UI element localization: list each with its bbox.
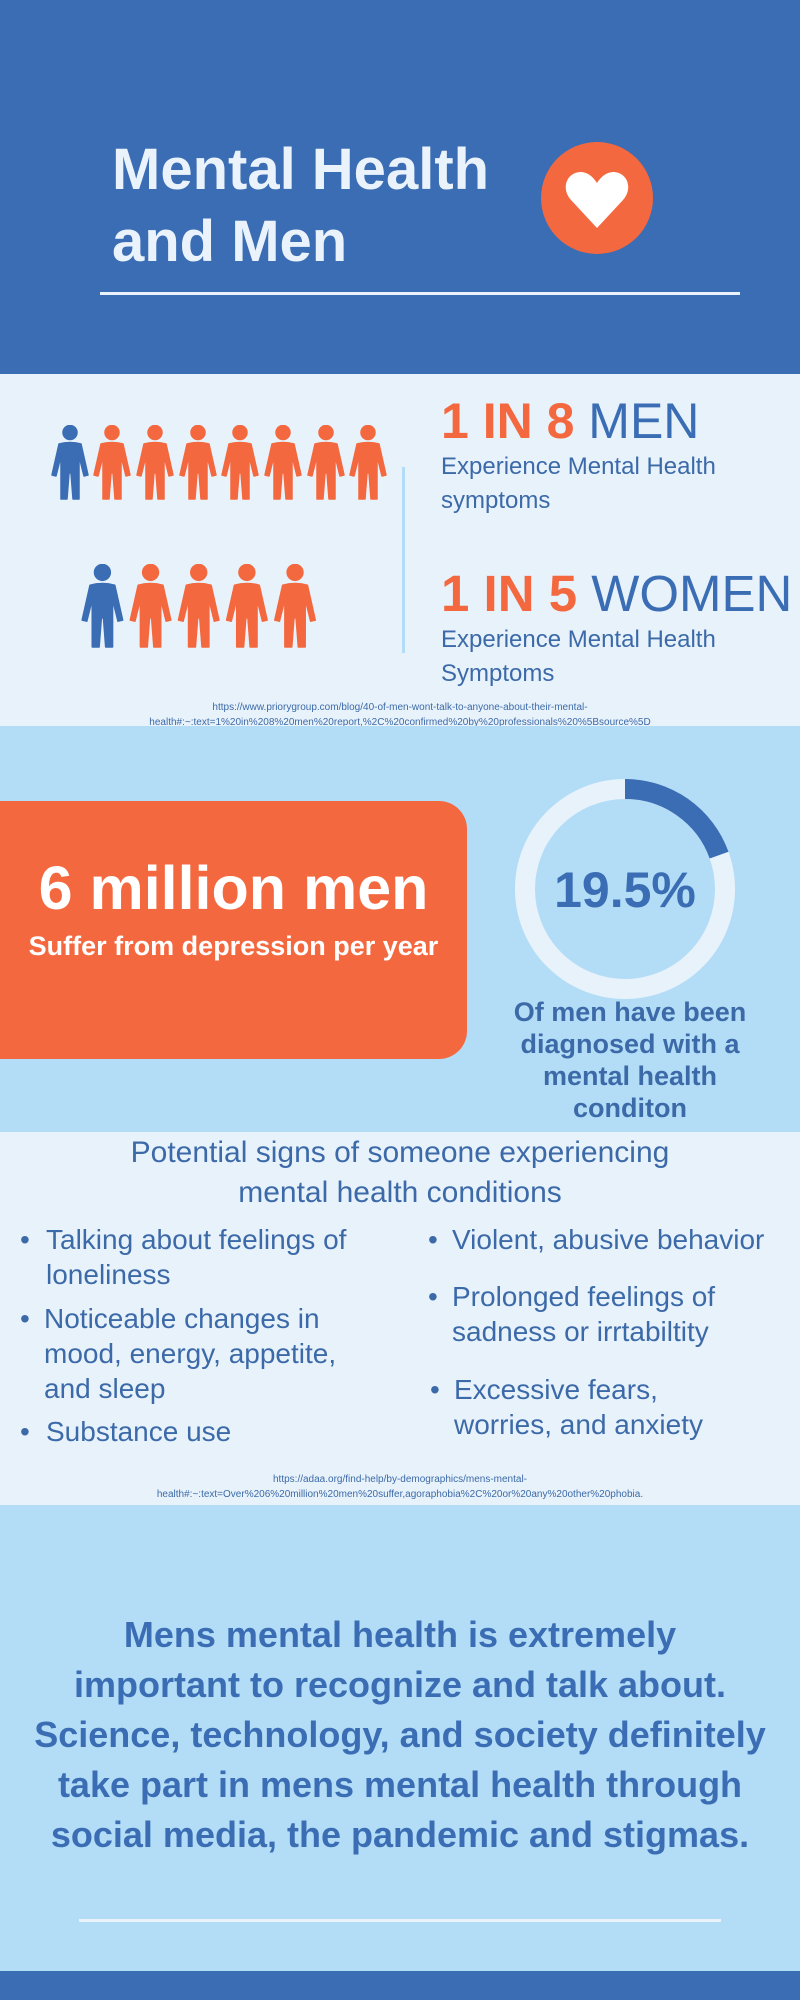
icon: row of 8 people bbox=[51, 425, 387, 500]
list: left column: • bbox=[20, 1416, 30, 1447]
stat: 1 in 5 women: Experience Mental Health bbox=[441, 626, 716, 653]
stat: 1 in 5 women bbox=[441, 565, 792, 687]
text: conclusion paragraph bbox=[34, 1614, 766, 1855]
list: right column: • bbox=[428, 1281, 438, 1312]
list: right column: • bbox=[430, 1374, 440, 1405]
callout: 6 million men: Suffer from depression per year bbox=[29, 931, 438, 961]
divider line bbox=[100, 292, 740, 295]
source url bbox=[149, 702, 651, 728]
source url bbox=[157, 1474, 643, 1500]
list: left column bbox=[20, 1224, 346, 1447]
list: right column: Violent, abusive behavior bbox=[452, 1224, 764, 1255]
list: right column: Prolonged feelings of sadness or irrtabiltity bbox=[452, 1281, 715, 1347]
list: right column: • bbox=[428, 1224, 438, 1255]
text: conclusion paragraph: social media, the pandemic and stigmas. bbox=[51, 1814, 749, 1855]
source url: https://adaa.org/find-help/by-demographics/mens-mental- bbox=[273, 1474, 527, 1485]
list: right column bbox=[428, 1224, 764, 1440]
heading bbox=[131, 1136, 669, 1209]
icon: row of 5 people bbox=[81, 564, 316, 648]
stat: 1 in 5 women: Symptoms bbox=[441, 660, 554, 687]
chart: donut 19.5% bbox=[515, 779, 735, 999]
title: and Men bbox=[112, 209, 347, 274]
list: left column: • bbox=[20, 1303, 30, 1334]
list: left column: • bbox=[20, 1224, 30, 1255]
list: right column: Excessive fears, worries, and anxiety bbox=[454, 1374, 703, 1440]
text: diagnosed caption: Of men have been diagnosed with a mental health conditon bbox=[514, 997, 746, 1123]
panel: statistics men/women bbox=[0, 374, 800, 726]
title: Mental Health bbox=[112, 137, 489, 202]
source url: health#:~:text=1%20in%208%20men%20report,%2C%20confirmed%20by%20professionals%20%5Bsource%5D bbox=[149, 717, 651, 728]
callout: 6 million men: 6 million men bbox=[39, 854, 428, 922]
source url: health#:~:text=Over%206%20million%20men%20suffer,agoraphobia%2C%20or%20any%20other%20phobia. bbox=[157, 1489, 643, 1500]
stat: 1 in 8 men bbox=[441, 393, 716, 514]
stat: 1 in 8 men: 1 IN 8 MEN bbox=[441, 393, 699, 449]
vertical divider bbox=[402, 467, 405, 653]
stat: 1 in 8 men: symptoms bbox=[441, 487, 550, 514]
text: conclusion paragraph: take part in mens mental health through bbox=[58, 1764, 742, 1805]
list: left column: Talking about feelings of loneliness bbox=[46, 1224, 346, 1290]
text: conclusion paragraph: Science, technology, and society definitely bbox=[34, 1714, 766, 1755]
text: conclusion paragraph: important to recognize and talk about. bbox=[74, 1664, 726, 1705]
header panel bbox=[0, 0, 800, 374]
callout: 6 million men bbox=[0, 801, 467, 1059]
list: left column: Substance use bbox=[46, 1416, 231, 1447]
source url: https://www.priorygroup.com/blog/40-of-men-wont-talk-to-anyone-about-their-mental- bbox=[212, 702, 588, 713]
text: conclusion paragraph: Mens mental health is extremely bbox=[124, 1614, 676, 1655]
panel: potential signs bbox=[0, 1132, 800, 1505]
chart: donut 19.5%: 19.5% bbox=[554, 862, 696, 918]
heading: Potential signs of someone experiencing bbox=[131, 1136, 669, 1169]
stat: 1 in 8 men: Experience Mental Health bbox=[441, 453, 716, 480]
list: left column: Noticeable changes in mood, energy, appetite, and sleep bbox=[44, 1303, 336, 1404]
divider line bbox=[79, 1919, 721, 1922]
stat: 1 in 5 women: 1 IN 5 WOMEN bbox=[441, 565, 792, 622]
title bbox=[112, 137, 489, 274]
heading: mental health conditions bbox=[238, 1176, 562, 1209]
icon: heart bbox=[541, 142, 653, 254]
footer band bbox=[0, 1971, 800, 2000]
panel: depression stats bbox=[0, 726, 800, 1132]
